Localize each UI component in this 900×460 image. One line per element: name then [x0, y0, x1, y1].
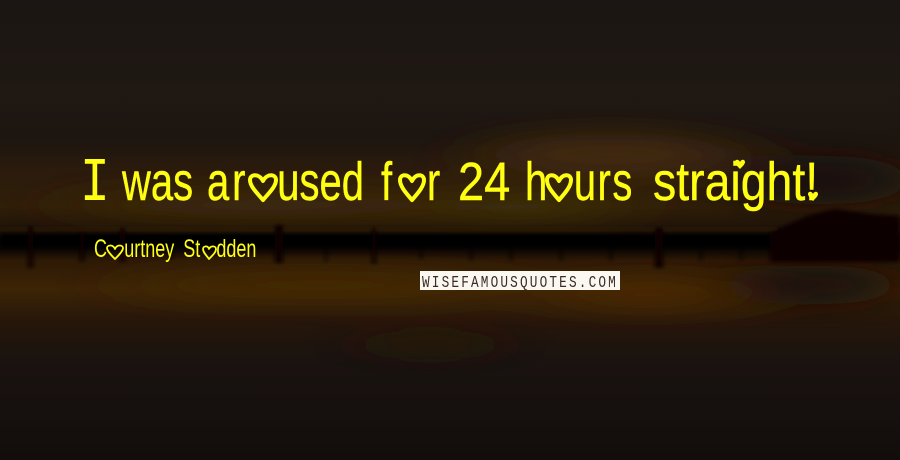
quote text — [80, 148, 818, 219]
quote text: I — [80, 148, 110, 219]
pier silhouette and reflection — [0, 209, 900, 268]
author name — [94, 234, 256, 263]
heart letters in quote — [250, 175, 571, 200]
quote text: was — [121, 152, 193, 213]
quote text: urs — [574, 152, 634, 213]
author name: C — [94, 234, 107, 263]
quote text: ar — [207, 152, 248, 213]
author name: St — [183, 234, 200, 263]
author name: dden — [216, 234, 256, 263]
quote text: 24 — [458, 151, 510, 212]
quote text: r — [427, 152, 440, 213]
quote text: h — [525, 152, 547, 213]
watermark badge: WISEFAMOUSQUOTES.COM — [422, 272, 618, 293]
quote text: straight! — [653, 151, 818, 212]
quote text: f — [381, 152, 393, 213]
heart letters in author name — [107, 246, 216, 259]
author name: urtney — [124, 234, 179, 263]
small heart dots on i and exclamation mark — [735, 160, 818, 201]
quote text: used — [277, 152, 364, 213]
